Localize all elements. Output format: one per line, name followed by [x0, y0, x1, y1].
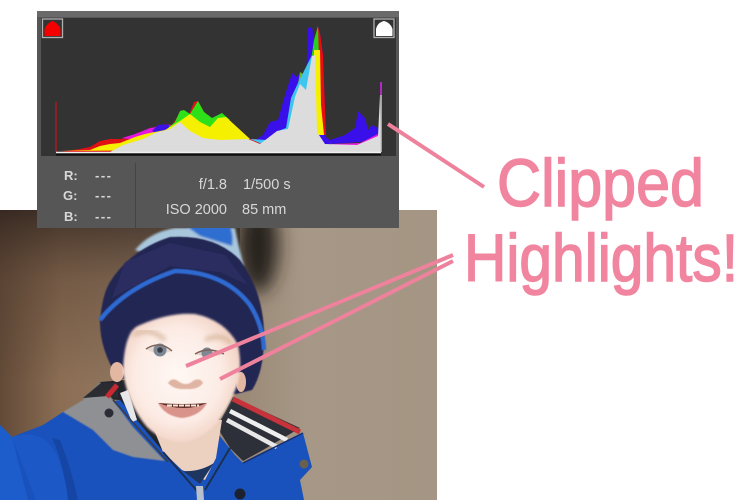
- photo: smiling boy in hat and blue jacket: [0, 197, 437, 500]
- RGB readout: G:: [63, 188, 77, 203]
- readout divider: [135, 163, 136, 228]
- hat bobble: [135, 226, 244, 266]
- camera settings: 1/500 s: [243, 177, 291, 193]
- ears: [110, 362, 246, 392]
- RGB readout: ---: [95, 209, 112, 224]
- histogram chart: [56, 26, 381, 154]
- camera settings: 85 mm: [242, 202, 286, 218]
- RGB readout: B:: [64, 209, 78, 224]
- callout text: Clipped Highlights!: Clipped: [497, 146, 704, 221]
- clipping indicator: highlights: [374, 19, 394, 38]
- clipping indicator: shadows: [42, 19, 62, 38]
- histogram panel: [37, 11, 399, 228]
- right collar with stripes: [217, 397, 308, 500]
- face: [123, 314, 240, 442]
- photo background: [0, 197, 437, 500]
- camera settings: [166, 177, 291, 218]
- pointer lines to face: [186, 255, 453, 379]
- RGB readout: ---: [95, 168, 112, 183]
- camera settings: f/1.8: [199, 177, 227, 193]
- neck and shirt: [150, 420, 230, 500]
- camera settings: ISO 2000: [166, 202, 227, 218]
- RGB readout: [63, 168, 112, 224]
- hat: [100, 237, 264, 394]
- hood and left collar: [63, 380, 172, 462]
- callout text: Clipped Highlights!: [464, 146, 738, 296]
- jacket: [0, 400, 312, 500]
- histogram plot background: [41, 18, 396, 156]
- RGB readout: ---: [95, 188, 112, 203]
- pointer line to histogram: [388, 124, 484, 187]
- RGB readout: R:: [64, 168, 78, 183]
